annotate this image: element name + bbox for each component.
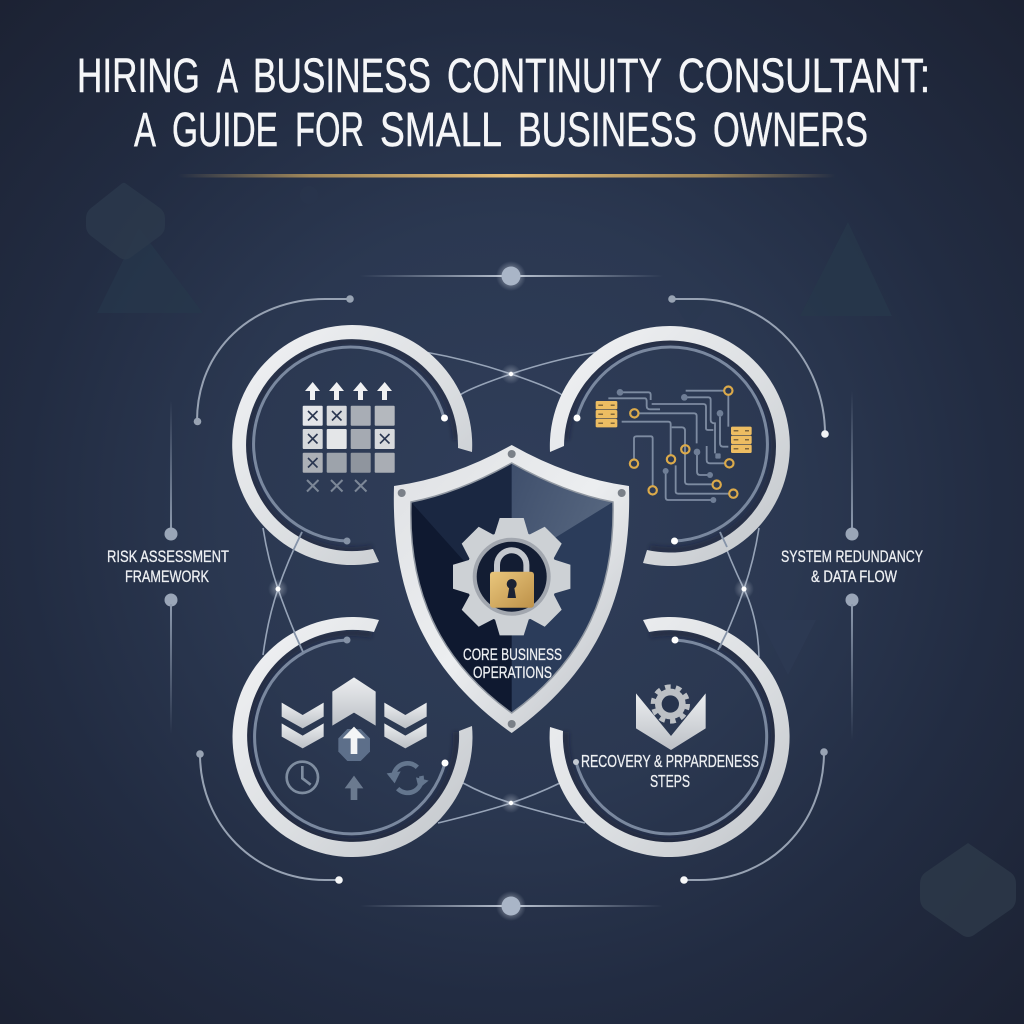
label: core business operations xyxy=(463,645,562,682)
glints xyxy=(268,364,754,813)
left side label: FRAMEWORK xyxy=(125,567,209,586)
label: core business operations: OPERATIONS xyxy=(473,663,552,682)
title: CONTINUITY xyxy=(447,50,662,103)
title: A xyxy=(134,104,156,157)
title xyxy=(77,50,930,157)
panel: recovery timeline ring xyxy=(233,617,473,857)
icon: data flow circuit xyxy=(596,386,752,503)
title: A xyxy=(217,50,238,103)
title: HIRING xyxy=(77,50,200,103)
label: recovery steps xyxy=(581,751,759,791)
icon: right server xyxy=(731,427,752,453)
gold divider xyxy=(178,174,836,178)
bottom node line xyxy=(360,891,663,921)
panel: system redundancy ring xyxy=(550,326,790,566)
title: BUSINESS xyxy=(518,104,697,157)
label: core business operations: CORE BUSINESS xyxy=(463,645,562,664)
title: GUIDE xyxy=(172,104,278,157)
outer connector arcs xyxy=(197,299,825,880)
label: recovery steps: STEPS xyxy=(650,771,690,791)
title: SMALL xyxy=(380,104,502,157)
label: recovery steps: RECOVERY & PRPARDENESS xyxy=(581,751,759,771)
icon: risk matrix grid xyxy=(303,382,395,492)
left side label xyxy=(107,400,229,734)
panel: risk assessment ring xyxy=(232,325,472,565)
right side label: & DATA FLOW xyxy=(811,567,897,586)
icon: left server xyxy=(596,401,617,427)
decorative background shapes xyxy=(86,183,1016,937)
title: OWNERS xyxy=(713,104,868,157)
icon: chevrons, clock and refresh xyxy=(282,677,429,800)
icon: padlock xyxy=(490,550,534,608)
title: CONSULTANT: xyxy=(678,50,930,103)
left side label: RISK ASSESSMENT xyxy=(107,547,229,566)
icon: gear xyxy=(453,518,570,635)
connector dots xyxy=(194,295,829,884)
shield rivets xyxy=(398,450,626,728)
top node line xyxy=(360,261,663,291)
network crossing lines xyxy=(263,352,759,823)
panel: recovery and preparedness ring xyxy=(550,617,790,857)
title: BUSINESS xyxy=(253,50,431,103)
right side label: SYSTEM REDUNDANCY xyxy=(781,547,923,566)
shield facets xyxy=(412,464,612,712)
title: FOR xyxy=(295,104,364,157)
right side label xyxy=(781,390,923,740)
line overlaps across rings xyxy=(293,532,727,652)
central shield xyxy=(394,445,629,733)
icon: gear and chevron xyxy=(636,687,706,750)
